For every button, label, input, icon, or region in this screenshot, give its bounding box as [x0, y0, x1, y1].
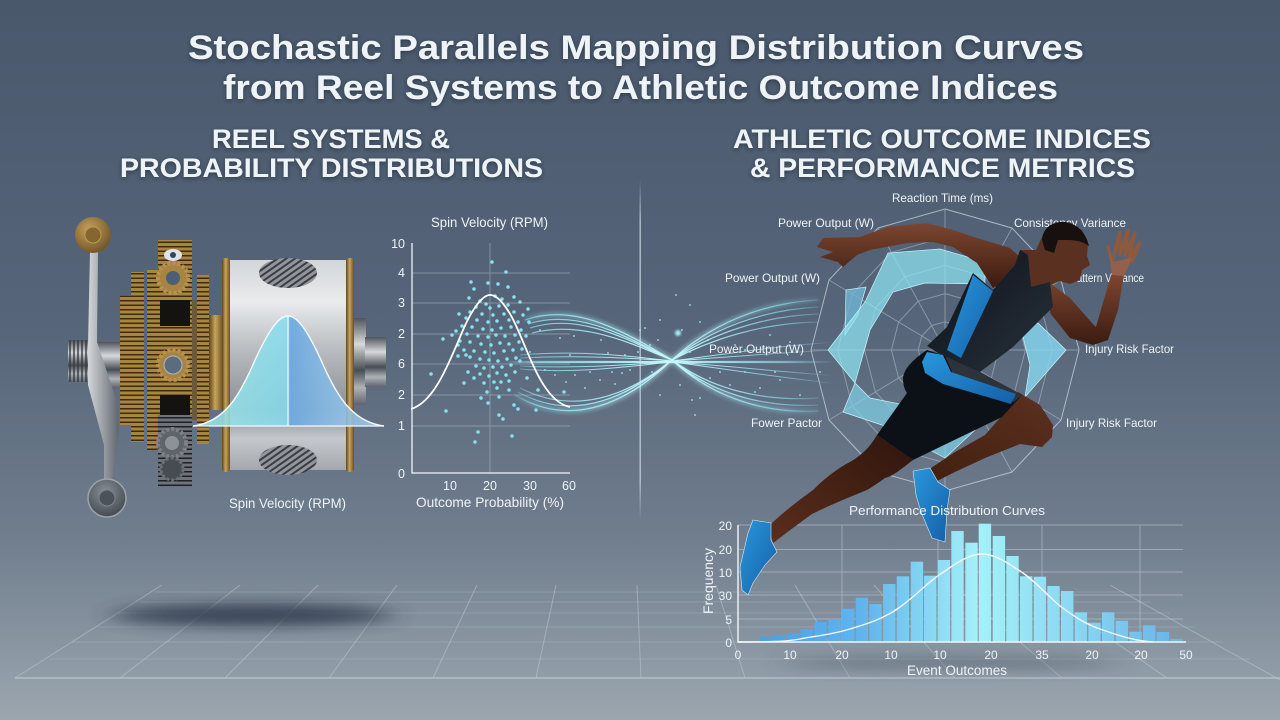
chart: scatter with normal curve: 3 — [398, 296, 405, 310]
histogram: 35 — [1035, 648, 1049, 662]
radar labels: Consistency Variance — [1014, 216, 1126, 230]
histogram title: Performance Distribution Curves — [849, 503, 1046, 518]
heading: reel systems: REEL SYSTEMS & — [212, 124, 450, 154]
chart: scatter with normal curve: 2 — [398, 327, 405, 341]
scatter points — [431, 262, 564, 442]
chart: scatter with normal curve: 4 — [398, 266, 405, 280]
raised hand — [1108, 230, 1140, 276]
histogram: 10 — [933, 648, 947, 662]
chart: scatter with normal curve — [391, 214, 576, 510]
radar labels: Injury Risk Factor — [1066, 416, 1157, 430]
radar data area — [828, 249, 1066, 458]
back arm — [817, 223, 1022, 288]
histogram axis labels — [719, 519, 732, 650]
histogram: 0 — [735, 648, 742, 662]
radar labels: Reaction Time (ms) — [892, 191, 993, 205]
histogram — [700, 519, 1193, 678]
heading: athletic outcomes: & PERFORMANCE METRICS — [750, 153, 1135, 183]
chart: scatter with normal curve: Outcome Probability (%) — [416, 494, 564, 510]
chart: scatter with normal curve: 60 — [562, 479, 576, 493]
sprinter shadow on floor — [780, 657, 1120, 669]
histogram: Event Outcomes — [907, 663, 1007, 678]
radar labels: Power Output (W) — [778, 216, 874, 230]
back leg — [768, 435, 913, 543]
back shoe — [740, 520, 777, 595]
chart: scatter with normal curve: 0 — [398, 467, 405, 481]
label: spin velocity under reel: Spin Velocity (RPM) — [229, 495, 346, 511]
histogram: Frequency — [700, 548, 716, 614]
histogram axis labels: 20 — [719, 519, 732, 533]
histogram: 10 — [783, 648, 797, 662]
radar labels: Fower Pactor — [751, 416, 822, 430]
histogram: 20 — [835, 648, 849, 662]
chart: scatter with normal curve: 2 — [398, 388, 405, 402]
icon: spool drum — [222, 258, 354, 475]
histogram axis labels: 5 — [725, 613, 732, 627]
neck and head — [1020, 223, 1090, 288]
normal curve — [411, 295, 570, 409]
radar labels: Power Output (W) — [709, 342, 804, 356]
shorts — [877, 350, 1022, 460]
particles — [530, 295, 820, 415]
reel shadow on floor — [112, 604, 392, 626]
chart title: Spin Velocity (RPM) — [431, 214, 548, 230]
perspective floor grid — [15, 585, 1280, 680]
chart: scatter with normal curve: 6 — [398, 357, 405, 371]
histogram: 20 — [984, 648, 998, 662]
chart: scatter with normal curve: 10 — [391, 237, 405, 251]
singlet — [927, 250, 1053, 372]
front arm — [1050, 275, 1124, 345]
radar labels: Injury Risk Factor — [1085, 342, 1174, 356]
icon: crank lever — [68, 217, 126, 517]
title: from Reel Systems to Athletic Outcome Indices — [223, 69, 1058, 107]
heading: reel systems — [120, 124, 543, 183]
histogram axis labels: 20 — [719, 543, 732, 557]
radar chart — [709, 191, 1174, 491]
histogram axis labels: 0 — [725, 636, 732, 650]
radar labels: Pattern Variance — [1070, 271, 1144, 285]
heading: reel systems: PROBABILITY DISTRIBUTIONS — [120, 153, 543, 183]
chart: scatter with normal curve: 1 — [398, 419, 405, 433]
title: Stochastic Parallels Mapping Distribution Curves — [188, 29, 1084, 67]
hair — [1042, 222, 1089, 253]
heading: athletic outcomes — [733, 124, 1151, 183]
chart: scatter with normal curve: 30 — [523, 479, 537, 493]
histogram: 20 — [1085, 648, 1099, 662]
icon: gear stack — [120, 240, 223, 487]
histogram curve — [738, 554, 1153, 642]
histogram axis labels: 10 — [719, 566, 732, 580]
reel mechanism illustration — [68, 217, 386, 517]
radar labels: Power Output (W) — [725, 271, 820, 285]
front shoe — [913, 468, 950, 542]
title — [188, 29, 1084, 107]
radar grid — [811, 209, 1079, 491]
data stream waves crossing divider — [500, 295, 850, 415]
histogram bars — [760, 524, 1183, 642]
central divider — [640, 180, 641, 520]
shorts stripe — [922, 352, 1016, 404]
distribution curve on spool — [193, 316, 384, 426]
sprinter illustration — [740, 222, 1140, 595]
histogram: 20 — [1134, 648, 1148, 662]
radar labels — [709, 191, 1174, 430]
front leg — [928, 392, 1053, 482]
heading: athletic outcomes: ATHLETIC OUTCOME INDICES — [733, 124, 1151, 154]
histogram: 50 — [1179, 648, 1193, 662]
singlet stripe — [947, 275, 993, 358]
histogram: 10 — [884, 648, 898, 662]
chart: scatter with normal curve: 10 — [443, 479, 457, 493]
icon: right axle — [354, 318, 386, 405]
chart: scatter with normal curve: 20 — [483, 479, 497, 493]
histogram axis labels: 30 — [719, 589, 732, 603]
waist panel — [945, 356, 1022, 402]
